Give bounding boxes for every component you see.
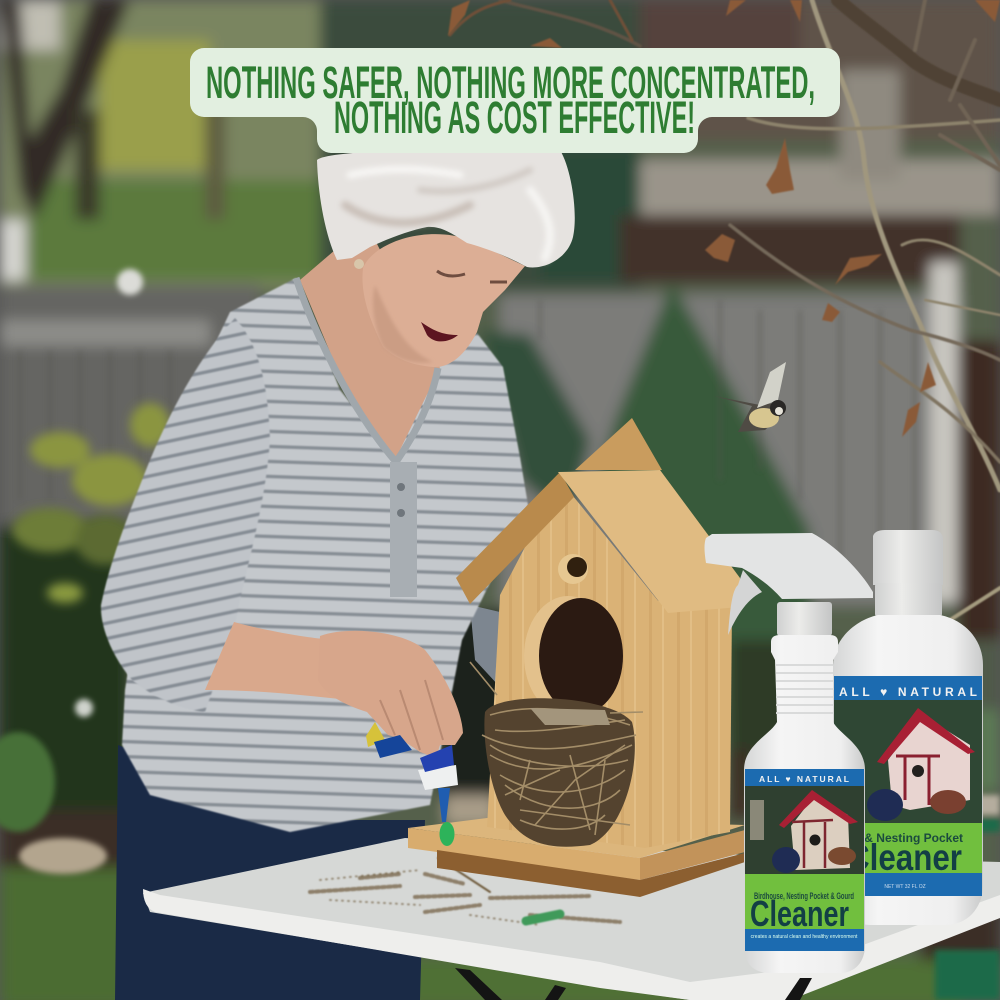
table front edge <box>143 889 1000 1000</box>
birdhouse <box>408 418 745 897</box>
blue band top <box>834 676 982 701</box>
eyes and nose shade <box>437 271 507 282</box>
left roof edge <box>456 472 574 604</box>
woman <box>101 150 575 1000</box>
dead leaves <box>448 0 1000 437</box>
twig nest <box>470 662 643 847</box>
base underside <box>437 850 745 897</box>
front wall <box>487 480 668 848</box>
base top surface <box>408 818 745 858</box>
bottom text: NET WT 32 FL OZ <box>884 884 926 890</box>
trigger lever <box>728 570 762 635</box>
cleaner word: Cleaner <box>750 893 849 934</box>
right roof face <box>558 470 740 613</box>
side wall <box>645 600 732 848</box>
table top <box>143 838 1000 1000</box>
fence slats <box>20 300 915 580</box>
sleeve <box>101 318 270 712</box>
bottom blue band <box>745 929 864 951</box>
neck and chest <box>300 240 440 458</box>
tagline: creates a natural clean and healthy environment <box>751 934 858 940</box>
white hair <box>317 150 575 267</box>
entrance hole <box>539 598 623 714</box>
cleaner word: Cleaner <box>847 837 962 878</box>
far sleeve <box>470 605 500 686</box>
mouth <box>421 322 458 341</box>
forearm <box>205 622 350 700</box>
trousers <box>115 745 425 1000</box>
large concentrate bottle <box>802 530 983 925</box>
spray collar <box>777 602 832 636</box>
bottle body <box>744 635 865 973</box>
neck ribs <box>776 665 833 713</box>
glue bottle in hand <box>366 722 458 846</box>
finger creases <box>380 680 443 750</box>
base right side <box>640 830 745 880</box>
hole rim <box>524 596 612 716</box>
table legs <box>455 968 812 1000</box>
green panel <box>834 823 982 873</box>
table <box>143 838 1000 1000</box>
spray bottle <box>704 533 873 973</box>
top blue band <box>745 769 864 787</box>
headline banner <box>190 48 840 153</box>
hair shading <box>345 169 550 258</box>
cap <box>873 530 943 585</box>
banner background <box>190 48 840 153</box>
button placket <box>390 462 417 597</box>
label birdhouse <box>867 708 975 821</box>
back roof peak <box>575 418 662 470</box>
tree branches top right <box>450 0 1000 620</box>
spilled debris on table <box>310 858 620 925</box>
label photo <box>745 786 864 874</box>
green panel <box>745 874 864 929</box>
hand <box>318 631 463 758</box>
striped shirt <box>122 278 528 832</box>
trigger head <box>704 533 873 599</box>
label photo <box>834 700 982 824</box>
all natural: ALL ♥ NATURAL <box>759 774 849 784</box>
flying chickadee <box>714 362 786 432</box>
all natural: ALL ♥ NATURAL <box>839 685 977 699</box>
neck <box>875 583 942 617</box>
earring <box>354 259 364 269</box>
blue band bottom <box>834 873 982 896</box>
yellow green shrub <box>12 403 170 603</box>
face <box>362 234 525 367</box>
product name: Birdhouse, Nesting Pocket & Gourd <box>754 891 854 901</box>
bottle body <box>833 615 983 925</box>
base front <box>408 828 640 880</box>
neckline trim <box>296 278 438 462</box>
small hole <box>558 554 588 584</box>
bottle product name: Birdhouse & Nesting Pocket <box>802 831 963 845</box>
cheek shading <box>373 285 433 363</box>
round shrub, rock and hose accents <box>0 269 1000 1000</box>
label birdhouse <box>750 790 858 873</box>
